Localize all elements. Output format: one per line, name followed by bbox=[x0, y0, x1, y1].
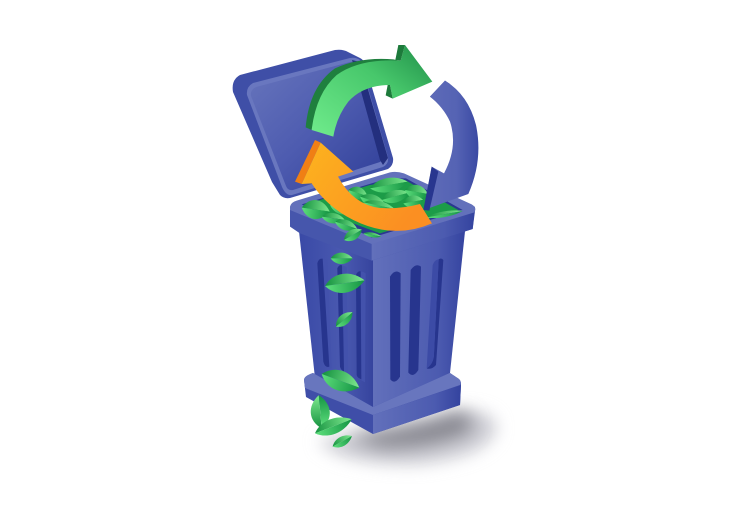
bin body bbox=[298, 222, 466, 408]
green arrow bbox=[306, 45, 432, 137]
left face bbox=[298, 222, 373, 408]
bin rim bbox=[290, 172, 475, 261]
bin base bbox=[304, 373, 461, 434]
falling leaves bbox=[309, 253, 366, 451]
right face bbox=[373, 222, 466, 408]
ground shadow bbox=[318, 410, 497, 465]
bin lid bbox=[233, 50, 393, 198]
recycling arrows bbox=[295, 45, 478, 231]
blue arrow bbox=[423, 81, 478, 211]
leaves in bin bbox=[300, 175, 463, 245]
orange arrow bbox=[295, 140, 432, 231]
slots bbox=[317, 258, 443, 382]
